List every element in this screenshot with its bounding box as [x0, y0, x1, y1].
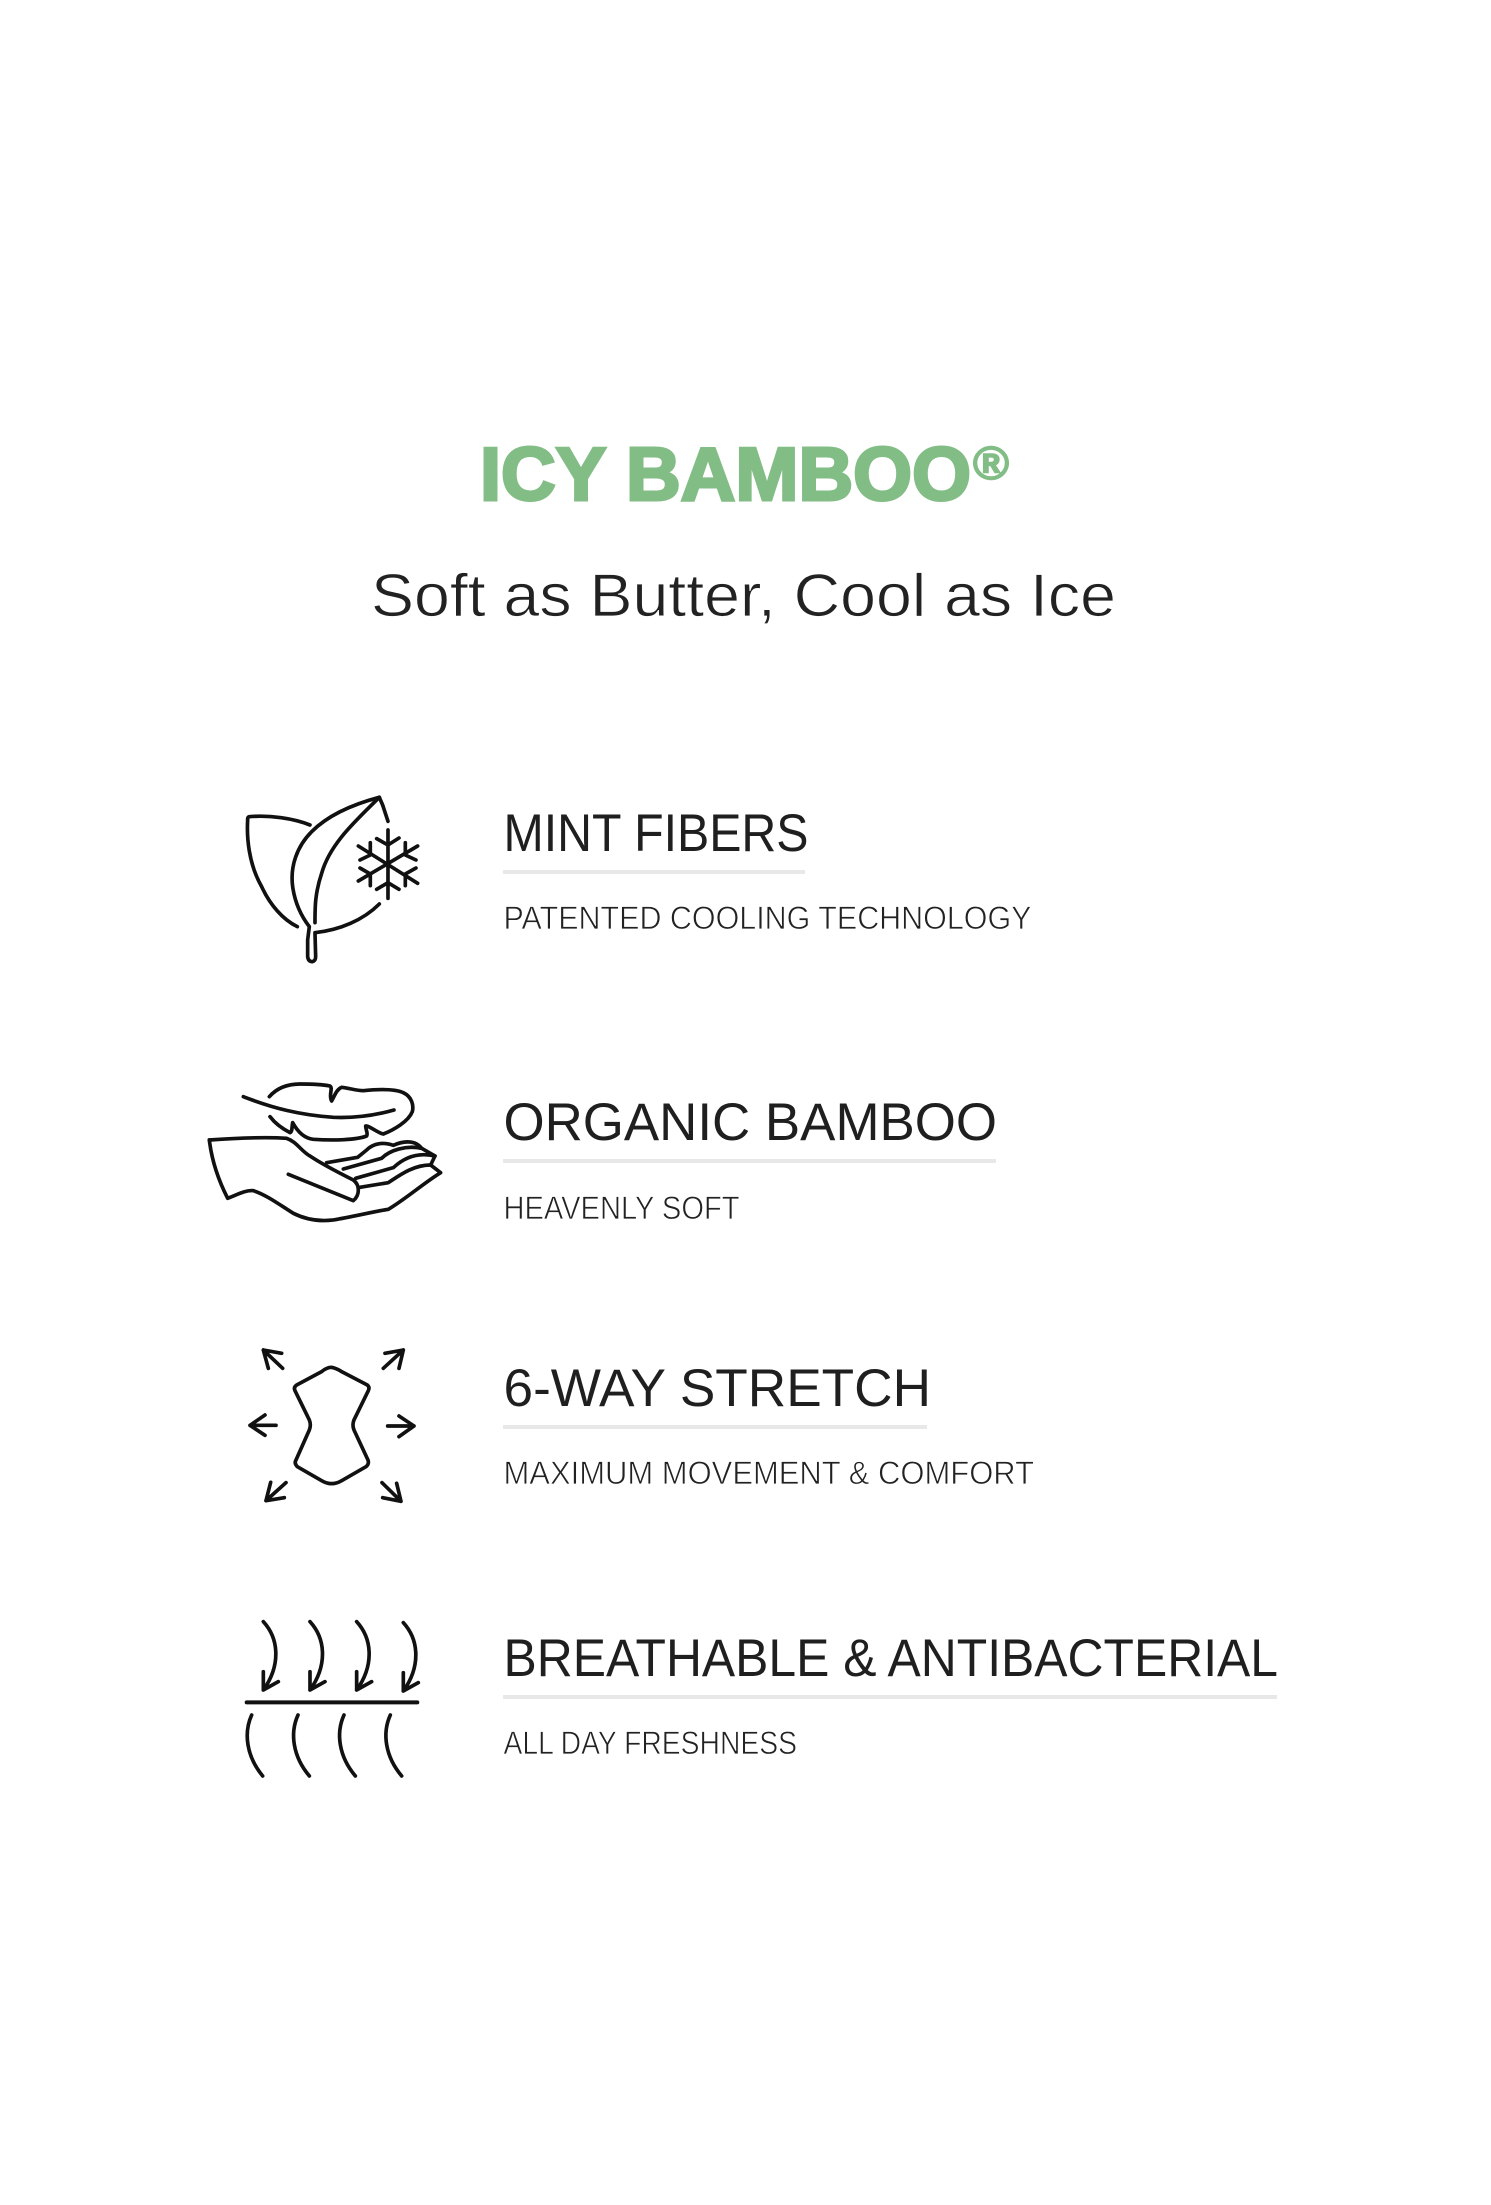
icon: hand with feather [209, 1084, 441, 1221]
text: heavenly soft: HEAVENLY SOFT [504, 1190, 740, 1226]
title: ® [973, 437, 1009, 489]
icon: stretch arrows [250, 1350, 414, 1501]
underline: 6-way stretch [503, 1425, 927, 1429]
subtitle: Soft as Butter, Cool as Ice [371, 562, 1116, 629]
heading: breathable & antibacterial: BREATHABLE & ANTIBACTERIAL [504, 1629, 1278, 1688]
heading: organic bamboo: ORGANIC BAMBOO [504, 1093, 997, 1152]
underline: breathable & antibacterial [503, 1695, 1277, 1699]
text: maximum movement & comfort: MAXIMUM MOVEMENT & COMFORT [504, 1455, 1034, 1491]
text: patented cooling technology: PATENTED COOLING TECHNOLOGY [504, 900, 1032, 936]
text: all day freshness: ALL DAY FRESHNESS [504, 1725, 797, 1761]
heading: 6-way stretch: 6-WAY STRETCH [504, 1359, 931, 1418]
underline: mint fibers [503, 870, 805, 874]
icon: leaves with snowflake [247, 797, 418, 962]
underline: organic bamboo [503, 1159, 996, 1163]
title: ICY BAMBOO [480, 432, 971, 516]
heading: mint fibers: MINT FIBERS [504, 804, 808, 863]
icon: breathable airflow [247, 1622, 418, 1776]
